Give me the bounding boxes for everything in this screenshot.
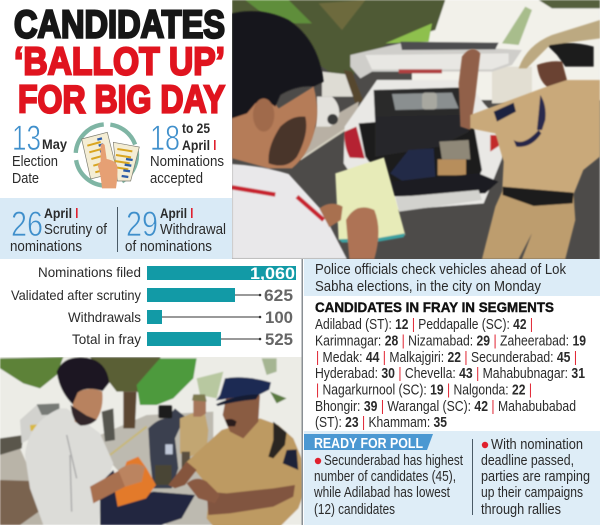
bar: total in fray: Total in fray	[72, 331, 141, 347]
bar: nominations filed	[38, 264, 296, 283]
bar: total in fray: 525	[265, 330, 293, 349]
bullet: campaigns: With nomination	[491, 437, 583, 453]
panel: scrutiny and withdrawal dates: 26	[11, 205, 43, 244]
title: ‘BALLOT UP’	[14, 40, 225, 84]
title: CANDIDATES	[14, 4, 225, 46]
bullet: campaigns: deadline passed,	[481, 453, 574, 469]
background policeman	[180, 413, 208, 457]
bar: validated after scrutiny	[11, 286, 293, 305]
segment list	[315, 317, 586, 431]
key date: nominations accepted: accepted	[150, 171, 203, 187]
bar: withdrawals	[68, 308, 293, 327]
panel: scrutiny and withdrawal dates	[0, 198, 232, 259]
bar chart: nominations funnel	[11, 264, 296, 349]
panel: scrutiny and withdrawal dates: of nominations	[125, 239, 212, 255]
segment list: (ST): 23 | Khammam: 35	[315, 415, 447, 431]
segment list: Adilabad (ST): 12 | Peddapalle (SC): 42 |	[315, 317, 533, 333]
key date: election date	[12, 119, 67, 187]
segment list: Bhongir: 39 | Warangal (SC): 42 | Mahabubabad	[315, 399, 576, 415]
panel: scrutiny and withdrawal dates: April	[44, 206, 72, 221]
bullet: highest and lowest: (12) candidates	[314, 502, 395, 518]
officer	[459, 49, 480, 130]
bar: validated after scrutiny: 625	[264, 286, 293, 305]
key date: election date: 13	[12, 119, 41, 158]
icon: ballot unit and voting finger	[76, 124, 139, 188]
bullet: campaigns: through rallies	[481, 502, 561, 518]
key date: election date: Date	[12, 171, 39, 187]
bullet: campaigns	[481, 437, 590, 518]
segment list: | Medak: 44 | Malkajgiri: 22 | Secunderabad: 45 |	[316, 350, 577, 366]
key date: nominations accepted: Nominations	[150, 154, 224, 170]
key date: nominations accepted: to 25	[182, 121, 210, 136]
segment list: | Nagarkurnool (SC): 19 | Nalgonda: 22 |	[316, 382, 532, 398]
panel: scrutiny and withdrawal dates: Withdrawal	[160, 222, 226, 238]
key date: nominations accepted: 18	[150, 119, 180, 158]
car	[344, 80, 512, 210]
bar: nominations filed: Nominations filed	[38, 264, 141, 280]
panel: candidates in fray in segments	[315, 299, 586, 431]
bar: validated after scrutiny: Validated after scrutiny	[11, 287, 141, 303]
photo: officer checking a man's bag	[0, 355, 305, 525]
bullet: campaigns: up their campaigns	[481, 485, 583, 501]
key date: nominations accepted: April	[182, 138, 210, 153]
bullet: highest and lowest: number of candidates (45),	[314, 469, 456, 485]
panel: caption: Sabha elections, in the city on Monday	[315, 279, 542, 295]
panel: ready for poll	[304, 431, 600, 525]
bar: total in fray	[72, 330, 293, 349]
man	[25, 408, 113, 525]
panel: scrutiny and withdrawal dates: 29	[126, 205, 158, 244]
panel: scrutiny and withdrawal dates: Scrutiny of	[44, 222, 108, 238]
notepad	[335, 157, 405, 240]
photo: police checking car boot	[232, 0, 600, 262]
title	[14, 4, 225, 122]
title: FOR BIG DAY	[18, 78, 225, 122]
segment list: Hyderabad: 30 | Chevella: 43 | Mahabubnagar: 31	[315, 366, 585, 382]
bullet: highest and lowest	[313, 453, 463, 518]
key date: election date: May	[42, 137, 67, 152]
segment list: Karimnagar: 28 | Nizamabad: 29 | Zaheerabad: 19	[315, 334, 586, 350]
bullet: highest and lowest: while Adilabad has lowest	[313, 485, 450, 501]
bar: withdrawals: 100	[265, 308, 293, 327]
left man	[232, 87, 317, 168]
photographer	[148, 408, 185, 488]
heading: CANDIDATES IN FRAY IN SEGMENTS	[315, 299, 554, 315]
panel: caption: Police officials check vehicles ahead of Lok	[315, 262, 567, 278]
bar: withdrawals: Withdrawals	[68, 309, 141, 325]
key date: election date: Election	[12, 154, 58, 170]
panel: scrutiny and withdrawal dates: April	[160, 206, 187, 221]
officer	[185, 418, 303, 525]
key date: nominations accepted	[150, 119, 224, 187]
bullet: highest and lowest: Secunderabad has highest	[324, 453, 463, 469]
label: ready for poll: READY FOR POLL	[314, 436, 423, 452]
panel: caption	[302, 259, 600, 525]
panel: scrutiny and withdrawal dates: nominations	[10, 239, 82, 255]
bags	[100, 470, 195, 525]
bar: nominations filed: 1,060	[250, 265, 295, 283]
